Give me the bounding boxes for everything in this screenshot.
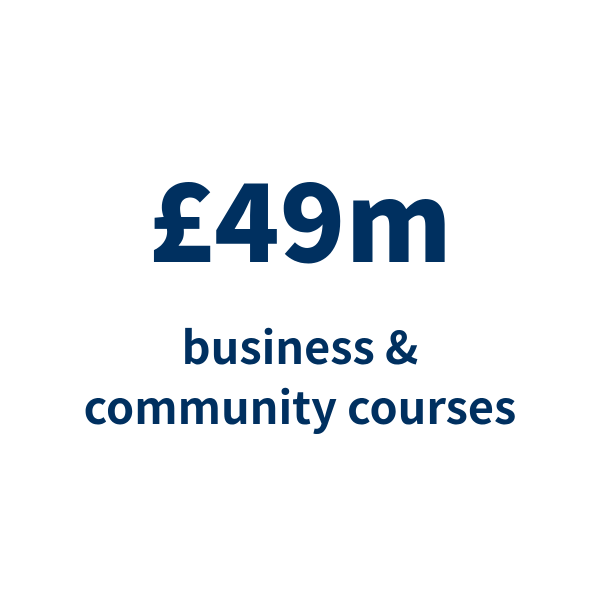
caption line one: business & [182,312,418,377]
caption text [84,312,516,437]
caption line two: community courses [84,372,516,437]
headline figure: £49m [148,138,452,294]
